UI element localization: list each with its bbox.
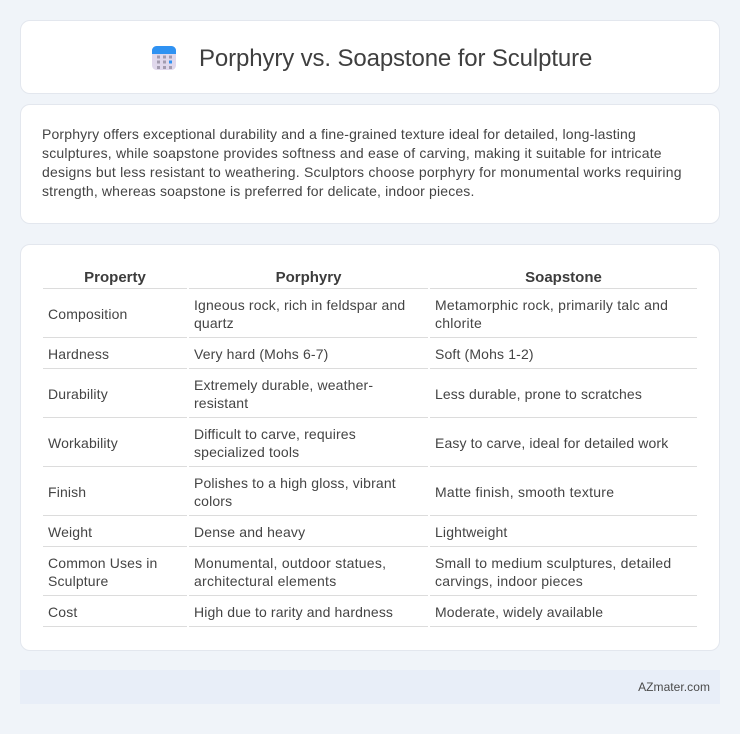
comparison table: specialized tools: [194, 444, 299, 460]
summary text: [42, 126, 682, 199]
row: Finish: Finish: [48, 484, 86, 500]
footer credit: AZmater.com: [638, 680, 710, 694]
comparison table: quartz: [194, 315, 234, 331]
comparison table: Moderate, widely available: [435, 604, 603, 620]
comparison table: Difficult to carve, requires: [194, 426, 356, 442]
comparison table: Small to medium sculptures, detailed: [435, 555, 671, 571]
summary panel: [20, 104, 720, 224]
comparison table: Less durable, prone to scratches: [435, 386, 642, 402]
row: Common Uses in Sculpture: [48, 555, 157, 589]
comparison table: Soft (Mohs 1-2): [435, 346, 534, 362]
comparison table: Metamorphic rock, primarily talc and: [435, 297, 668, 313]
comparison table: Monumental, outdoor statues,: [194, 555, 386, 571]
comparison table: architectural elements: [194, 573, 336, 589]
comparison table: chlorite: [435, 315, 482, 331]
row: Hardness: Hardness: [48, 346, 109, 362]
row: Durability: Durability: [48, 386, 108, 402]
column heading: Soapstone: Soapstone: [525, 269, 602, 286]
comparison table: Lightweight: [435, 524, 507, 540]
comparison table: Matte finish, smooth texture: [435, 484, 614, 500]
comparison table: resistant: [194, 395, 248, 411]
row: Composition: Composition: [48, 306, 127, 322]
icon: calendar: [152, 46, 176, 70]
comparison table: Very hard (Mohs 6-7): [194, 346, 328, 362]
comparison table: Igneous rock, rich in feldspar and: [194, 297, 405, 313]
summary text: strength, whereas soapstone is preferred for delicate, indoor pieces.: [42, 183, 474, 199]
comparison table: Easy to carve, ideal for detailed work: [435, 435, 668, 451]
summary text: sculptures, while soapstone provides softness and ease of carving, making it suitable for intricate: [42, 145, 662, 161]
title: Porphyry vs. Soapstone for Sculpture: [199, 45, 592, 72]
comparison table: Dense and heavy: [194, 524, 305, 540]
row: Cost: Cost: [48, 604, 77, 620]
header panel: [20, 20, 720, 94]
comparison table: carvings, indoor pieces: [435, 573, 583, 589]
summary text: designs but less resistant to weathering. Sculptors choose porphyry for monumental works requiring: [42, 164, 682, 180]
comparison table: Extremely durable, weather-: [194, 377, 373, 393]
column heading: Porphyry: Porphyry: [276, 269, 341, 286]
summary text: Porphyry offers exceptional durability and a fine-grained texture ideal for detailed, long-lasting: [42, 126, 636, 142]
footer bar: [20, 670, 720, 704]
comparison table: Polishes to a high gloss, vibrant: [194, 475, 396, 491]
row: Workability: Workability: [48, 435, 118, 451]
column heading: Property: Property: [84, 269, 146, 286]
row: Weight: Weight: [48, 524, 92, 540]
comparison table: High due to rarity and hardness: [194, 604, 393, 620]
comparison table: colors: [194, 493, 232, 509]
row: Common Uses in Sculpture: Sculpture: [48, 573, 108, 589]
row: Common Uses in Sculpture: Common Uses in: [48, 555, 157, 571]
table panel: [20, 244, 720, 651]
